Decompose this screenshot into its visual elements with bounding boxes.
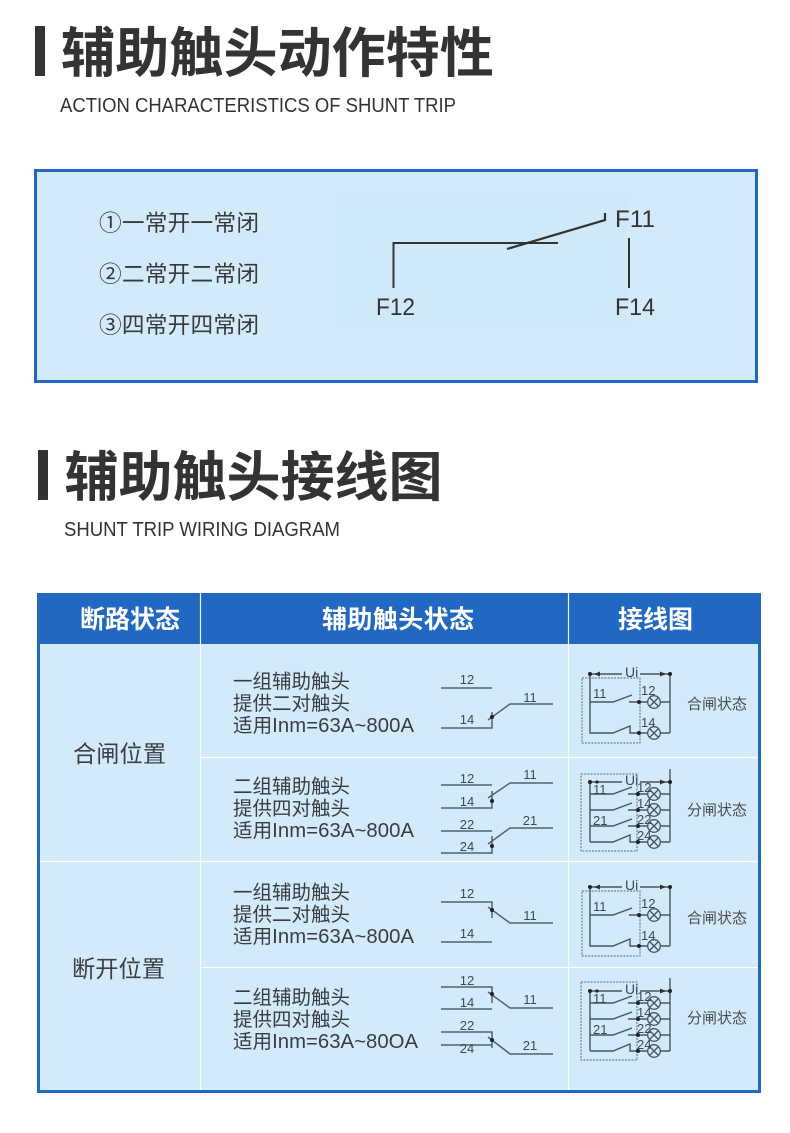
contact symbol: row 3: 12	[460, 886, 474, 901]
label: split state 1: 分闸状态	[687, 802, 747, 819]
contact symbol: row 4: 14	[460, 995, 474, 1010]
circuit: row 2 split state: 21	[593, 813, 607, 828]
text: row 2: 适用Inm=63A~800A	[233, 820, 414, 842]
text: row 1: 适用Inm=63A~800A	[233, 715, 414, 737]
contact symbol: row 3	[441, 886, 553, 942]
text: row 4: 二组辅助触头	[233, 987, 350, 1009]
circuit: row 4 split state: 21	[593, 1022, 607, 1037]
circuit: row 1 closed state: 11	[593, 686, 606, 701]
contact type list	[99, 210, 259, 338]
text: row 2: 提供四对触头	[233, 798, 350, 820]
text: row 1: 一组辅助触头	[233, 671, 350, 693]
panel: action characteristics	[36, 170, 756, 382]
heading: wiring diagram: 辅助触头接线图	[64, 448, 442, 508]
heading: action characteristics: ACTION CHARACTERISTICS OF SHUNT TRIP	[60, 95, 456, 117]
contact symbol: row 3: 11	[523, 908, 537, 923]
diagram: F11 F12 F14 contact: F11	[615, 206, 655, 233]
contact symbol: row 1: 12	[460, 672, 474, 687]
contact symbol: row 4: 21	[523, 1038, 537, 1053]
row label: open position: 断开位置	[72, 956, 165, 982]
text: row 1	[233, 671, 414, 737]
contact symbol: row 2	[441, 767, 553, 854]
row label: closed position: 合闸位置	[73, 741, 166, 767]
circuit: row 4 split state: 14	[637, 1005, 651, 1020]
diagram: F11 F12 F14 contact: F12	[376, 294, 415, 321]
contact type list: ③四常开四常闭	[99, 312, 259, 338]
text: row 2: 二组辅助触头	[233, 776, 350, 798]
label: split state 2: 分闸状态	[687, 1010, 747, 1027]
circuit: row 3 closed state: Ui	[625, 877, 638, 893]
circuit: row 2 split state: Ui	[625, 772, 638, 788]
contact symbol: row 4: 11	[523, 992, 537, 1007]
contact symbol: row 4	[441, 973, 553, 1056]
table header: 断路状态	[80, 606, 180, 634]
diagram: F11 F12 F14 contact: F14	[615, 294, 655, 321]
heading: action characteristics	[35, 24, 494, 117]
contact symbol: row 4: 24	[460, 1041, 474, 1056]
contact symbol: row 2: 21	[523, 813, 537, 828]
text: row 3: 提供二对触头	[233, 904, 350, 926]
text: row 1: 提供二对触头	[233, 693, 350, 715]
circuit: row 1 closed state: Ui	[625, 664, 638, 680]
circuit: row 4 split state: 22	[637, 1021, 651, 1036]
circuit: row 4 split state	[581, 978, 672, 1060]
text: row 4	[233, 987, 418, 1053]
label: closed state 2: 合闸状态	[687, 910, 747, 927]
circuit: row 1 closed state	[582, 664, 672, 743]
diagram: F11 F12 F14 contact	[337, 198, 655, 322]
heading: wiring diagram: SHUNT TRIP WIRING DIAGRAM	[64, 519, 340, 541]
circuit: row 4 split state: Ui	[625, 981, 638, 997]
circuit: row 2 split state	[581, 769, 672, 851]
circuit: row 3 closed state: 14	[641, 928, 655, 943]
circuit: row 1 closed state: 14	[641, 715, 655, 730]
circuit: row 2 split state: 11	[593, 782, 606, 797]
circuit: row 1 closed state: 12	[641, 683, 655, 698]
contact symbol: row 3: 14	[460, 926, 474, 941]
text: row 4: 提供四对触头	[233, 1009, 350, 1031]
contact symbol: row 2: 12	[460, 771, 474, 786]
heading: wiring diagram	[38, 448, 442, 541]
contact symbol: row 4: 12	[460, 973, 474, 988]
text: row 3	[233, 882, 414, 948]
contact symbol: row 1: 14	[460, 712, 474, 727]
circuit: row 3 closed state: 12	[641, 896, 655, 911]
circuit: row 3 closed state	[582, 877, 672, 956]
text: row 3: 适用Inm=63A~800A	[233, 926, 414, 948]
circuit: row 2 split state: 12	[637, 780, 651, 795]
circuit: row 4 split state: 12	[637, 989, 651, 1004]
circuit: row 2 split state: 14	[637, 796, 651, 811]
contact symbol: row 4: 22	[460, 1018, 474, 1033]
table header: 辅助触头状态	[322, 605, 474, 634]
contact symbol: row 2: 11	[523, 767, 537, 782]
contact type list: ②二常开二常闭	[99, 261, 259, 287]
table: wiring states	[37, 593, 761, 1092]
table header: 接线图	[618, 606, 693, 634]
contact type list: ①一常开一常闭	[99, 210, 259, 236]
contact symbol: row 2: 14	[460, 794, 474, 809]
contact symbol: row 1	[441, 672, 553, 728]
contact symbol: row 2: 22	[460, 817, 474, 832]
label: closed state 1: 合闸状态	[687, 696, 747, 713]
text: row 4: 适用Inm=63A~80OA	[233, 1031, 418, 1053]
circuit: row 2 split state: 24	[637, 828, 651, 843]
text: row 3: 一组辅助触头	[233, 882, 350, 904]
table header	[80, 605, 693, 634]
circuit: row 2 split state: 22	[637, 812, 651, 827]
circuit: row 4 split state: 24	[637, 1037, 651, 1052]
text: row 2	[233, 776, 414, 842]
contact symbol: row 1: 11	[523, 690, 537, 705]
heading: action characteristics: 辅助触头动作特性	[61, 24, 494, 84]
contact symbol: row 2: 24	[460, 839, 474, 854]
circuit: row 3 closed state: 11	[593, 899, 606, 914]
circuit: row 4 split state: 11	[593, 991, 606, 1006]
